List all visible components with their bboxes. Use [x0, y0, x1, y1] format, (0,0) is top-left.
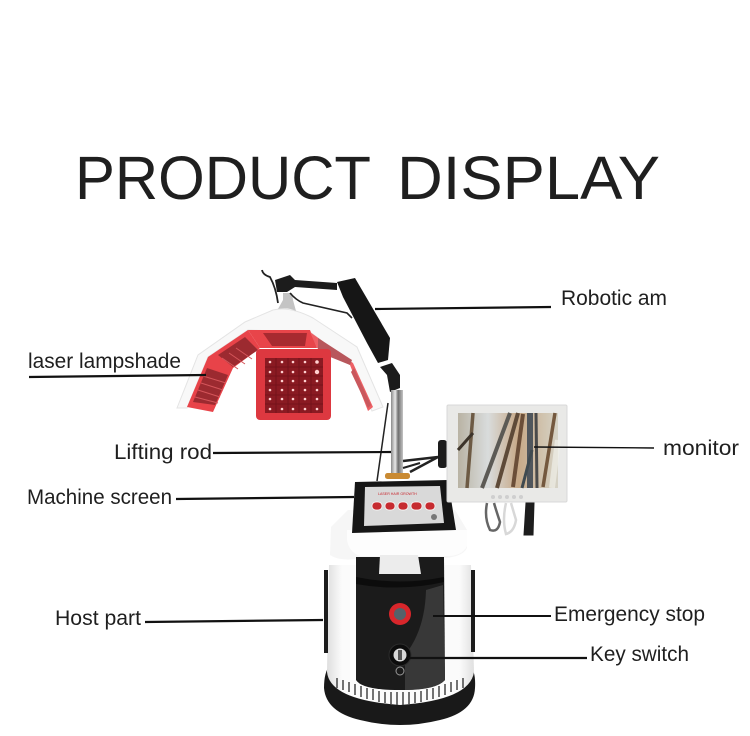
front black panel [356, 555, 445, 690]
title: PRODUCT [75, 144, 371, 212]
top red panel [248, 330, 317, 348]
hair image [458, 413, 558, 488]
white shell [177, 309, 383, 411]
lifting rod [377, 390, 447, 481]
label: key switch: Key switch [590, 643, 689, 666]
black base [324, 665, 475, 725]
emergency stop button [389, 603, 411, 625]
monitor cables [486, 503, 534, 535]
side handles [324, 570, 328, 653]
left red wing [187, 330, 260, 412]
label: lifting rod: Lifting rod [114, 441, 212, 464]
centre red panel [256, 349, 331, 420]
machine screen: LASER HAIR GROWTH [378, 492, 417, 496]
title: DISPLAY [397, 144, 660, 212]
white cylinder [327, 565, 474, 705]
right red wing [310, 332, 373, 411]
label: monitor: monitor [663, 437, 739, 460]
monitor buttons [491, 495, 523, 499]
title [75, 144, 660, 212]
machine screen [352, 480, 456, 533]
hanging stem [278, 293, 296, 311]
laser lampshade [177, 293, 383, 420]
panel grid [265, 358, 323, 413]
label: emergency stop: Emergency stop [554, 603, 705, 626]
white body and base [324, 510, 475, 725]
label: laser lampshade: laser lampshade [28, 350, 181, 373]
vents [337, 678, 463, 705]
label: host part: Host part [55, 607, 141, 630]
robotic arm [262, 270, 400, 392]
shoulder [330, 510, 467, 559]
screen icons [372, 502, 435, 510]
key switch [389, 644, 411, 675]
label: machine screen: Machine screen [27, 486, 172, 509]
LED dots [269, 360, 319, 410]
monitor [447, 405, 567, 535]
label: robotic arm: Robotic am [561, 287, 667, 310]
